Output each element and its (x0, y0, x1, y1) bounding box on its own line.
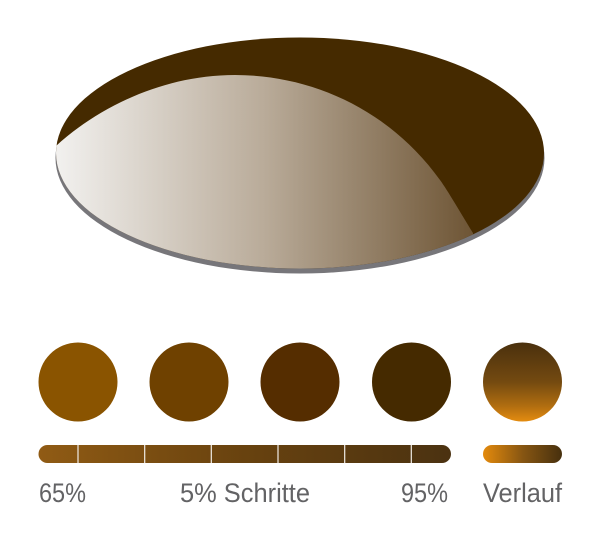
gradient bar (483, 445, 562, 463)
swatch 85% (260, 342, 340, 422)
stepped bar (38, 445, 451, 463)
lens light gradient area (56, 75, 473, 268)
swatch gradient (483, 342, 562, 422)
label 65%: 65% (39, 478, 86, 508)
lens shadow edge (56, 42, 544, 274)
swatch 65% (38, 342, 118, 422)
label 5% Schritte: 5% Schritte (180, 478, 310, 508)
lens illustration (56, 38, 544, 274)
label Verlauf: Verlauf (483, 478, 562, 508)
swatch circles (38, 342, 562, 422)
swatch 75% (150, 342, 228, 422)
swatch 95% (372, 342, 451, 422)
label 95%: 95% (401, 478, 448, 508)
lens dark base (56, 38, 544, 268)
